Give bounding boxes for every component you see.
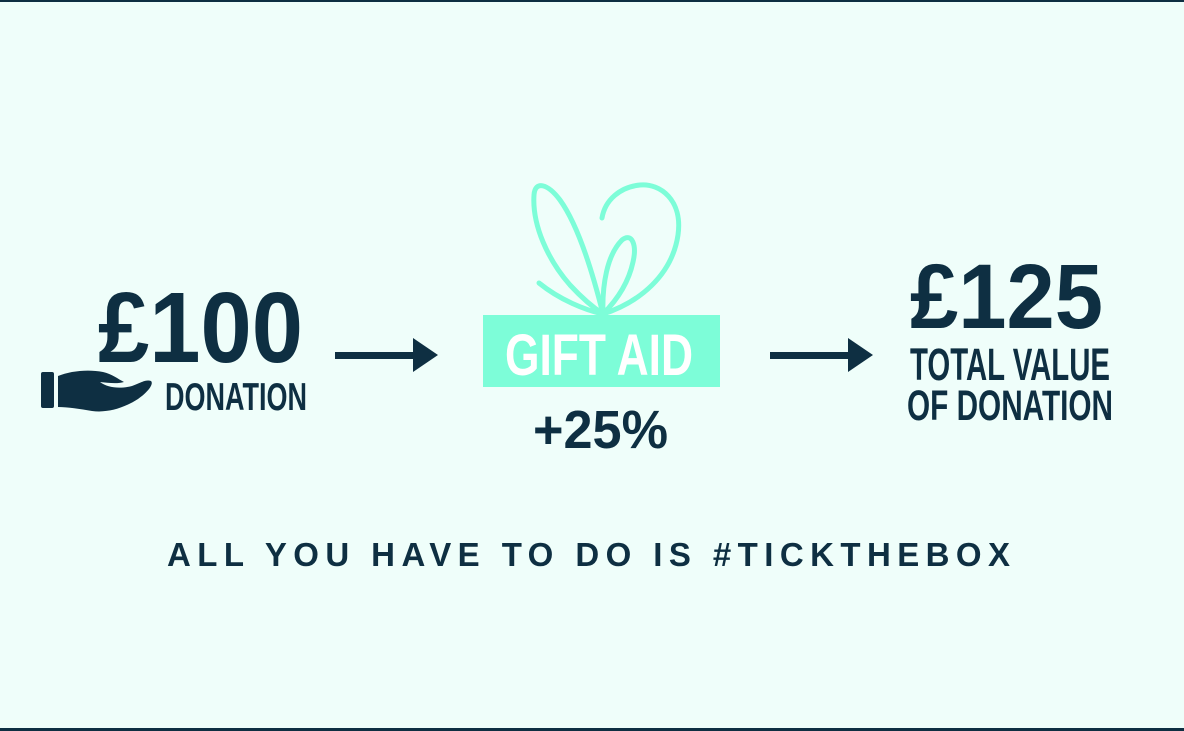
icon: hand — [41, 371, 152, 411]
icon: bow — [534, 185, 679, 314]
panel: total — [907, 246, 1113, 430]
arrow 1 — [335, 338, 438, 372]
amount £100: £100 — [98, 272, 303, 384]
tagline: ALL YOU HAVE TO DO IS #TICKTHEBOX — [167, 536, 1010, 573]
gift aid box — [483, 315, 720, 387]
arrow 2 — [770, 338, 873, 372]
panel: donation — [41, 272, 307, 419]
label: donation: DONATION — [165, 376, 307, 419]
label: +25%: +25% — [533, 400, 668, 460]
amount £125: £125 — [910, 246, 1103, 348]
label: gift aid: GIFT AID — [505, 323, 693, 388]
panel: gift aid — [483, 185, 720, 460]
